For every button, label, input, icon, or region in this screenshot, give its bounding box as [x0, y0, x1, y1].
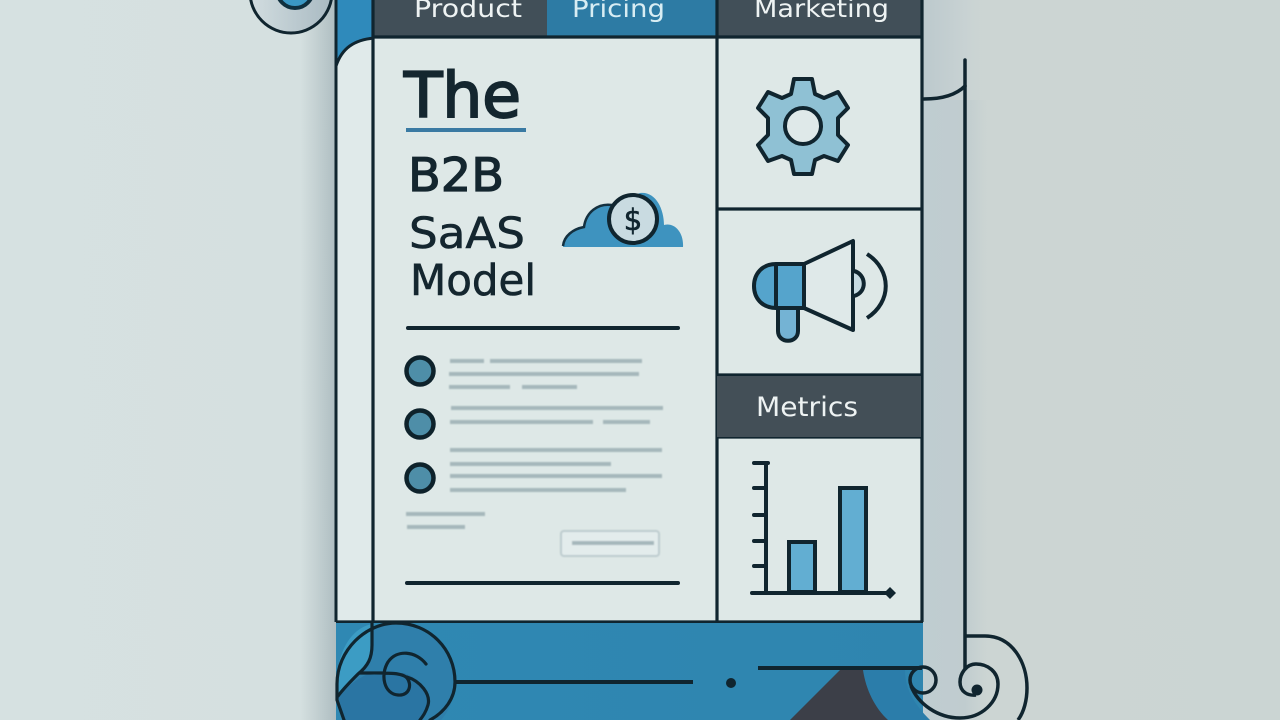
- icon: cloud with dollar coin: [563, 193, 683, 247]
- title: Model: [410, 256, 536, 306]
- bullet 1: [406, 358, 434, 384]
- tab: Pricing: [547, 0, 717, 36]
- icon: megaphone: [754, 241, 886, 341]
- icon: right vertical rail with hook: [924, 60, 965, 668]
- left scroll strip: [336, 0, 374, 622]
- bar chart: [752, 463, 896, 599]
- list: bullet items: [406, 358, 663, 529]
- title: The: [403, 59, 521, 132]
- icon: cloud with dollar coin: $: [624, 203, 642, 237]
- main paper: [374, 37, 922, 622]
- title: SaAS: [409, 209, 525, 259]
- dark triangle: [790, 670, 888, 720]
- dot: [726, 678, 736, 688]
- button placeholder: [561, 531, 659, 556]
- panel: Metrics header: Metrics: [756, 392, 858, 423]
- tab: Product: [373, 0, 547, 36]
- panel: Metrics header: [717, 376, 921, 437]
- title underline: [406, 128, 526, 132]
- icon: bottom-left scroll curl: [337, 623, 455, 720]
- bullet 2: [406, 410, 434, 438]
- title: B2B: [408, 148, 504, 202]
- placeholder text lines: [406, 359, 663, 529]
- tab: Marketing: [717, 0, 921, 36]
- sheet frame lines: [336, 0, 923, 622]
- icon: top-left scroll curl: [250, 0, 332, 33]
- panel: document sheet: [336, 0, 923, 622]
- panel: bottom blue band: [336, 623, 930, 720]
- bullet 3: [406, 464, 434, 492]
- divider: bottom rule: [405, 581, 680, 585]
- divider: top rule: [406, 326, 680, 330]
- icon: bottom-right spiral: [910, 636, 1027, 720]
- title: [403, 59, 536, 306]
- icon: gear: [758, 79, 848, 174]
- bottom lines: [455, 668, 922, 682]
